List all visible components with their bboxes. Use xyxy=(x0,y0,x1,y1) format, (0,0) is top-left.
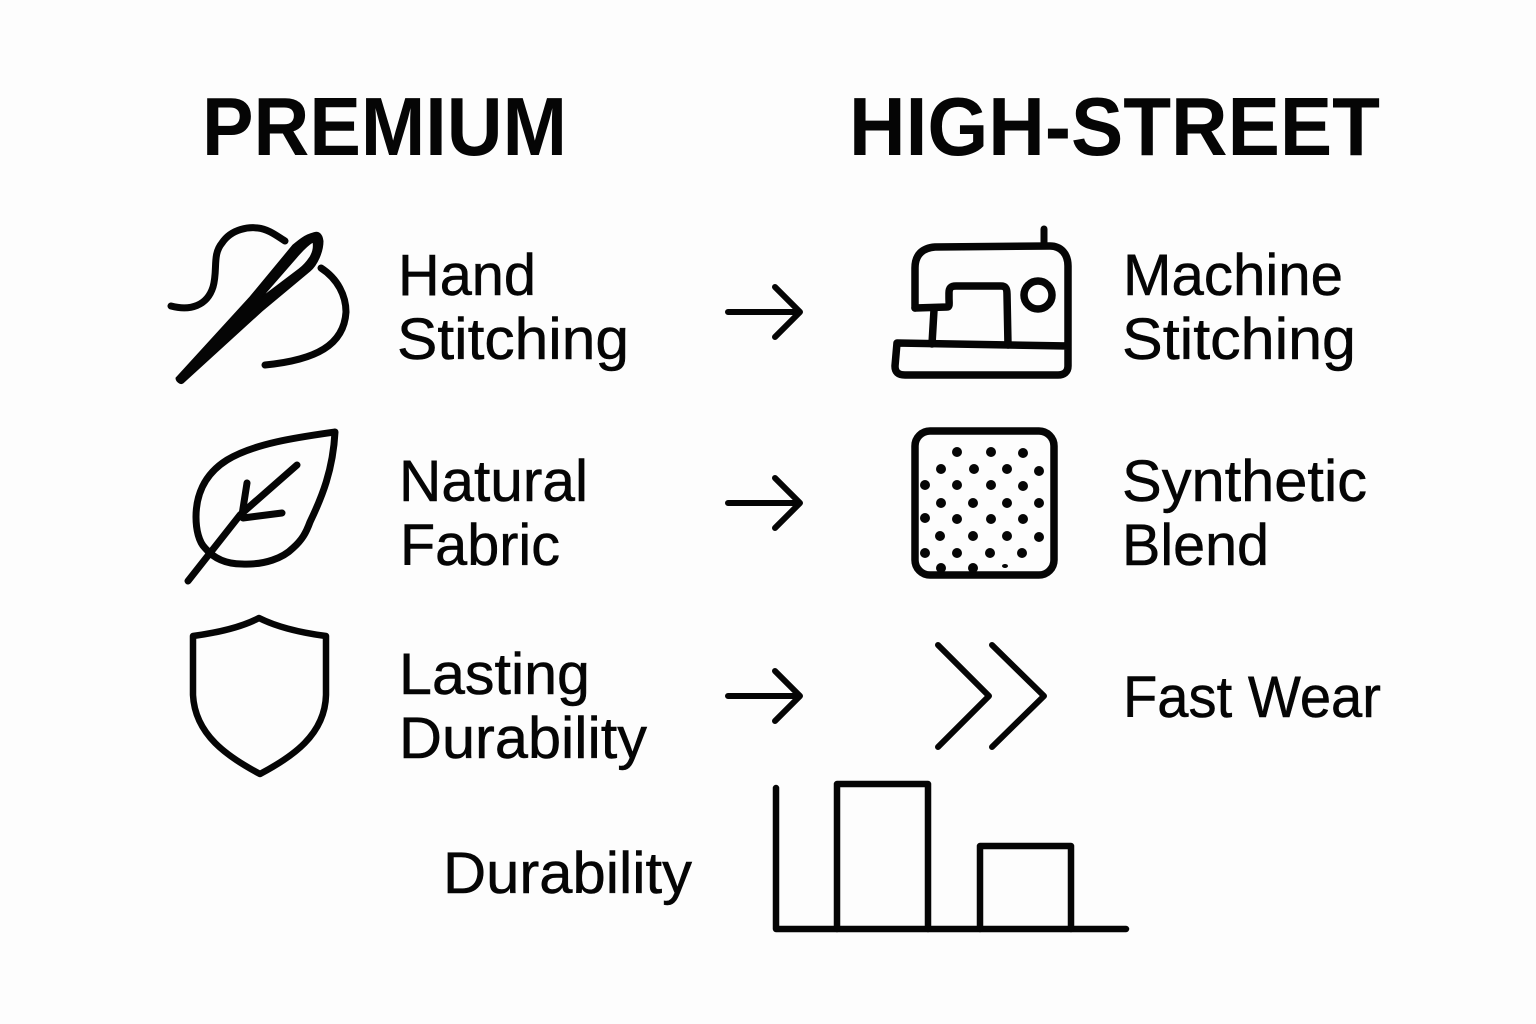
icon: double chevron xyxy=(938,645,1044,747)
label: durability chart: Durability xyxy=(443,841,692,906)
label: fast wear: Fast Wear xyxy=(1123,665,1381,730)
label: hand stitching xyxy=(397,243,629,372)
label: natural fabric xyxy=(399,449,588,578)
label: synthetic blend xyxy=(1122,449,1367,578)
label: machine stitching: Machine xyxy=(1123,243,1343,308)
arrow: lasting durability to fast wear xyxy=(728,671,800,721)
arrow: hand stitching to machine stitching xyxy=(728,287,800,337)
icon: sewing machine xyxy=(895,229,1068,375)
label: machine stitching: Stitching xyxy=(1122,307,1356,372)
label: hand stitching: Hand xyxy=(398,243,536,308)
label: synthetic blend: Synthetic xyxy=(1122,449,1367,514)
label: lasting durability: Durability xyxy=(399,706,647,771)
label: machine stitching xyxy=(1122,243,1356,372)
icon: needle and thread xyxy=(171,228,346,384)
icon: shield xyxy=(193,618,326,774)
label: natural fabric: Fabric xyxy=(400,513,560,578)
icon: leaf xyxy=(188,432,335,581)
bar chart: durability xyxy=(776,784,1126,929)
label: lasting durability: Lasting xyxy=(399,642,590,707)
label: hand stitching: Stitching xyxy=(397,307,629,372)
label: lasting durability xyxy=(399,642,647,771)
icon: synthetic fabric swatch xyxy=(915,431,1054,575)
label: synthetic blend: Blend xyxy=(1122,513,1269,578)
heading: premium: PREMIUM xyxy=(202,80,567,173)
label: natural fabric: Natural xyxy=(399,449,588,514)
heading: high-street: HIGH-STREET xyxy=(849,80,1380,173)
arrow: natural fabric to synthetic blend xyxy=(728,478,800,528)
